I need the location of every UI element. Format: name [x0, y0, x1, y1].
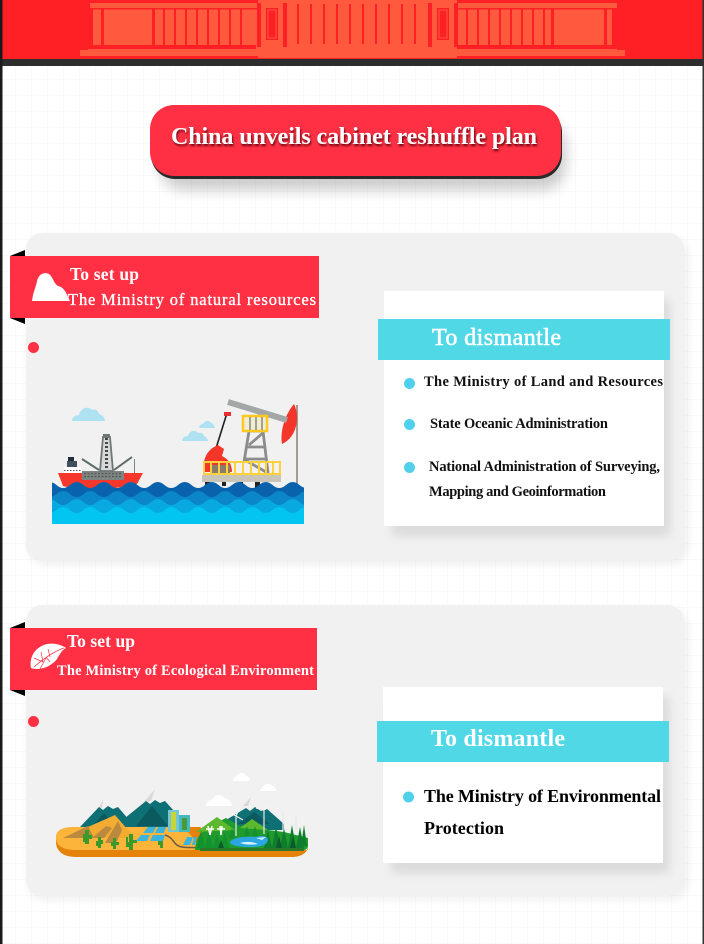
card: to dismantle 1	[378, 291, 670, 536]
panel: natural resources	[10, 233, 687, 564]
list item: environmental protection: Protection	[424, 818, 504, 838]
wind turbines and pylons	[236, 810, 296, 836]
page frame left	[0, 0, 2, 944]
red dot	[28, 342, 39, 353]
green land	[195, 818, 308, 850]
card: to dismantle 2	[377, 687, 669, 873]
icon: leaf	[31, 644, 66, 669]
lake	[230, 836, 268, 847]
page frame right	[702, 0, 704, 944]
island base	[56, 827, 308, 857]
list item: surveying: Mapping and Geoinformation	[429, 484, 606, 500]
heading: to set up: To set up	[67, 631, 135, 651]
panel: ecological environment	[10, 605, 687, 899]
title: China unveils cabinet reshuffle plan	[171, 124, 537, 150]
ribbon: to set up natural resources	[10, 250, 319, 324]
red dot	[28, 716, 39, 727]
icon: hill	[32, 273, 70, 301]
band: to dismantle: To dismantle	[432, 325, 561, 351]
ministry name: The Ministry of natural resources	[68, 290, 316, 309]
heading: to set up: To set up	[70, 264, 139, 284]
list item: state oceanic administration: State Oceanic Administration	[430, 416, 608, 432]
mountains	[80, 800, 284, 830]
oil pump	[202, 402, 297, 488]
sea waves	[52, 482, 304, 524]
list item: surveying: National Administration of Surveying,	[429, 459, 660, 475]
list item: land and resources: The Ministry of Land and Resources	[424, 374, 663, 390]
band: to dismantle	[378, 319, 670, 360]
clouds	[206, 773, 276, 806]
band: to dismantle	[377, 721, 669, 762]
header banner	[0, 0, 704, 66]
list item: environmental protection: The Ministry of Environmental	[424, 786, 661, 806]
sand dunes	[63, 815, 135, 838]
title pill	[150, 105, 566, 190]
trees	[197, 826, 258, 848]
solar panels	[136, 827, 197, 845]
illustration: ship, oil pump and sea	[52, 399, 304, 524]
snow streaks	[98, 789, 251, 810]
clouds	[72, 408, 215, 441]
ribbon: to set up ecological environment	[10, 622, 317, 696]
icon: government building silhouette	[80, 0, 625, 58]
cacti	[83, 830, 163, 850]
city buildings	[168, 810, 190, 832]
ministry name: The Ministry of Ecological Environment	[57, 663, 314, 679]
list item: surveying	[404, 459, 660, 500]
illustration: landscape island	[56, 773, 308, 857]
list item: environmental protection	[403, 786, 661, 838]
band: to dismantle: To dismantle	[431, 726, 565, 752]
winding road	[165, 835, 198, 848]
ship	[58, 434, 143, 489]
